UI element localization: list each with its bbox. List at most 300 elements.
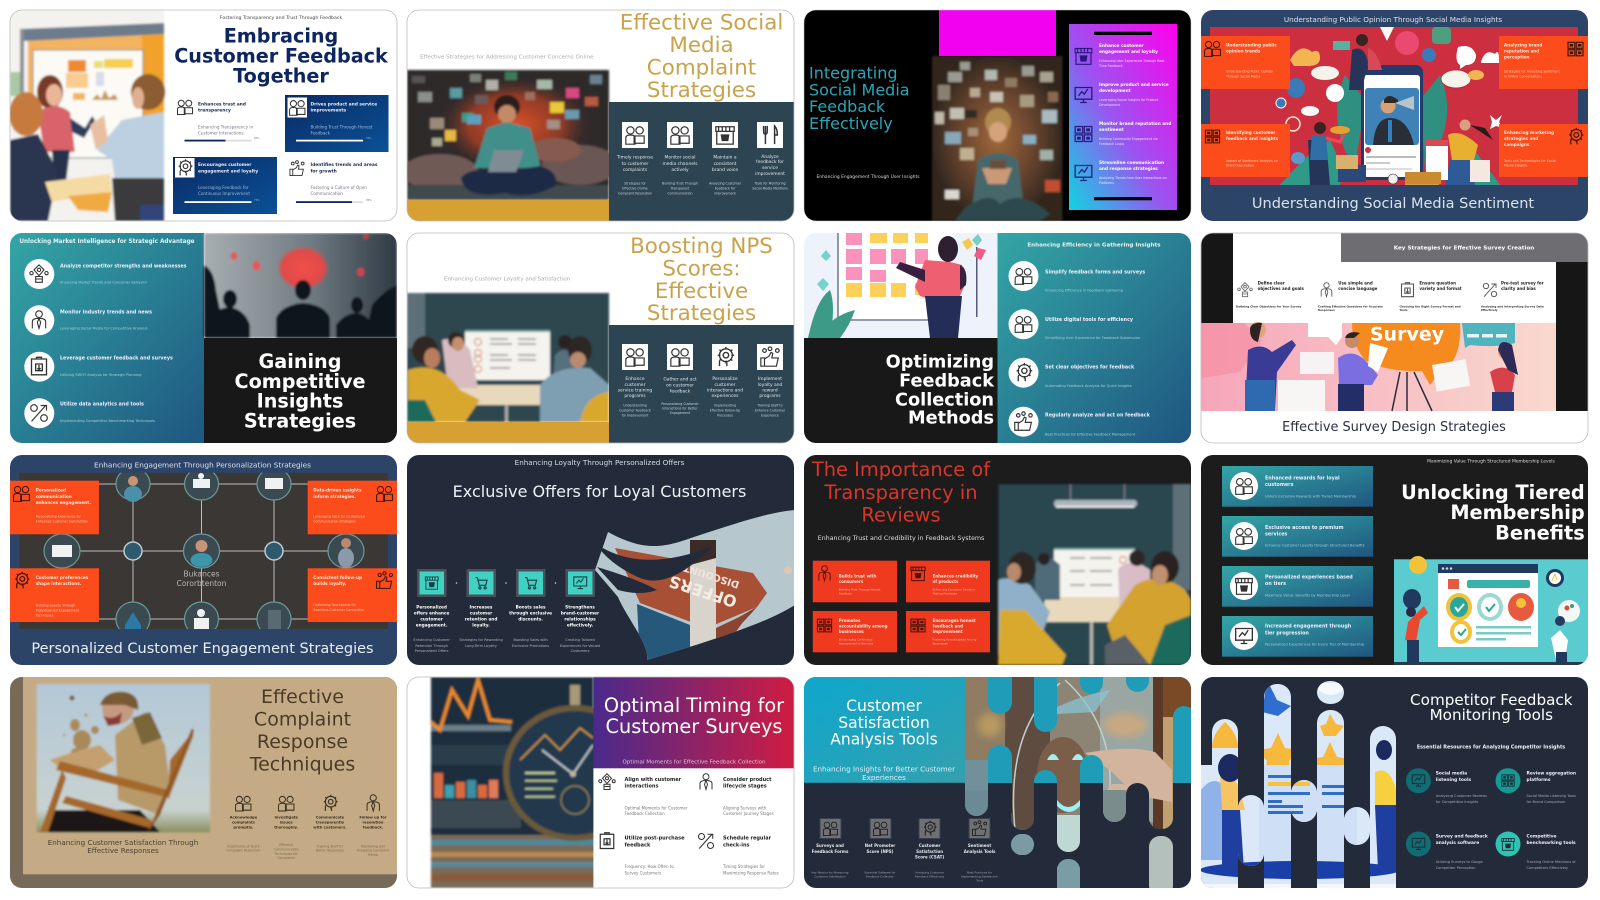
band: gold footer: [407, 200, 609, 221]
box: brand reputation: Analyzing brand: [1504, 42, 1542, 48]
item: training: customer: [625, 382, 646, 388]
item: listening: Analyzing Customer Reviews: [1436, 794, 1487, 798]
item: csat: Score (CSAT): [915, 854, 944, 859]
item: analyze feedback: Social Media Mentions: [752, 186, 788, 190]
item: improve product: development: [1099, 88, 1131, 94]
image: silhouettes facing red sphere: [204, 233, 397, 338]
box: builds trust: Feedback: [839, 591, 852, 595]
item: acknowledge: [226, 796, 260, 853]
item: benchmarking: Tracking Online Mentions of: [1526, 860, 1576, 864]
item: listening: Social media: [1436, 770, 1467, 776]
box: enhances credibility: Enhances credibility: [933, 574, 979, 578]
item: analyze feedback: [752, 122, 788, 190]
box: personalized communication: Enhanced Customer Satisfaction: [36, 520, 88, 524]
item: improve product: Leveraging Social Insights for Product: [1099, 98, 1159, 102]
box: encourages feedback: Fostering Accountability Among: [933, 637, 977, 641]
item: personalized offers: offers enhance: [414, 610, 449, 616]
subtitle: Essential Resources for Analyzing Competitor Insights: [1417, 745, 1565, 751]
card: drives product: Drives product and service: [310, 101, 377, 107]
item: loyalty: reward: [762, 388, 778, 394]
item: loyalty: Implement: [758, 376, 782, 382]
box: customer feedback: feedback and insights: [1226, 136, 1279, 141]
item: consistent voice: Analyzing Customer: [709, 181, 742, 185]
item: monitor brand: Monitor brand reputation and: [1099, 121, 1171, 127]
item: analyze and act: Best Practices for Effective Feedback Management: [1045, 432, 1136, 436]
item: gather: Gather and act: [663, 376, 697, 382]
item: acknowledge: complaints: [232, 821, 256, 825]
item: follow up: Follow up for: [359, 816, 387, 820]
box: promotes accountability: Encouraging Continuous: [839, 637, 873, 641]
item: variety: Tools: [1400, 308, 1408, 312]
box: customer preferences: Techniques: [35, 614, 54, 618]
item: pre-test: clarity and bias: [1501, 286, 1536, 291]
header gradient: Optimal Moments for Effective Feedback Collection: [622, 760, 766, 766]
box: builds trust: Building Trust Through Honest: [839, 587, 881, 591]
title: Satisfaction: [838, 714, 930, 732]
item: check-ins: Timing Strategies for: [722, 864, 765, 869]
item: rewards: Enhanced rewards for loyal: [1265, 475, 1340, 481]
item: streamline communication: [1075, 160, 1167, 185]
item: objectives: Set clear objectives for feedback: [1045, 365, 1135, 371]
item: loyalty: programs: [759, 393, 781, 399]
subtitle: Enhancing Trust and Credibility in Feedback Systems: [818, 535, 984, 542]
item: investigate: [274, 796, 299, 860]
item: data analytics: Implementing Competitive Benchmarking Techniques: [60, 419, 155, 423]
title: Social Media: [809, 80, 910, 100]
box: marketing: strategies and: [1504, 136, 1538, 141]
box: brand reputation: in Online Conversations: [1504, 75, 1542, 79]
item: aggregation: Review aggregation: [1526, 770, 1576, 776]
item: gather: Personalizing Customer: [661, 402, 699, 406]
block: black title background: [204, 338, 397, 443]
item: premium access: Enhance Customer Loyalty through Structured Benefits: [1265, 544, 1365, 548]
panel: Embracing Customer Feedback Together: [9, 10, 397, 221]
box: customer preferences: Individualized Engagement: [36, 609, 80, 613]
panel: dark strategies: [609, 325, 794, 443]
box: enhances credibility: of products: [933, 579, 959, 584]
title: Feedback: [899, 372, 995, 392]
network diagram: Cororbtenton: [177, 579, 227, 588]
item: surveys: [812, 818, 849, 878]
item: retention: customer: [470, 610, 493, 616]
panel: Competitor Feedback Monitoring Tools: [1200, 677, 1588, 888]
image: meeting room: [407, 293, 609, 422]
item: communicate: Better Responses: [316, 849, 344, 853]
title: Effective Survey Design Strategies: [1282, 420, 1506, 435]
network diagram: Bukances: [183, 570, 220, 578]
item: personalize: Processes: [717, 413, 733, 417]
item: objectives: Automating Feedback Analysis for Quick Insights: [1045, 384, 1132, 388]
card: identifies trends: Identifies trends and areas: [310, 162, 378, 168]
card: encourages engagement: Continuous Improvement: [198, 191, 250, 196]
item: nps: Feedback Collection: [866, 874, 894, 878]
box: brand reputation: [1499, 36, 1588, 89]
item: personalized offers: Personalized Offers: [415, 649, 449, 653]
title: Effective Social: [620, 10, 783, 35]
panel: Effective Survey Design Strategies: [1200, 233, 1588, 443]
item: monitor brand: sentiment: [1099, 127, 1124, 133]
item: check-ins: Schedule regular: [723, 836, 772, 842]
item: objectives: [1236, 280, 1305, 308]
card: drives product: [285, 95, 388, 152]
item: lifecycle: Consider product: [723, 777, 772, 783]
item: nps: Score (NPS): [867, 849, 894, 854]
box: customer feedback: Brand Reputation: [1226, 164, 1254, 168]
item: pre-test: Analyzing and Interpreting Survey Data: [1481, 304, 1544, 308]
item: relationships: Customers: [571, 649, 590, 653]
box: public opinion: Understanding Public Opinion: [1226, 70, 1273, 74]
item: language: Responses: [1318, 308, 1335, 312]
item: sales: discounts.: [518, 616, 543, 622]
item: timely response: Timely response: [616, 154, 653, 160]
box: follow-up: builds loyalty.: [313, 581, 347, 586]
item: communicate: Training Staff for: [316, 844, 344, 848]
item: monitor channels: Monitor social: [665, 154, 695, 160]
title: Gaining: [259, 350, 341, 373]
image: discount offer sign in ribbon shape: DISCOUNTS: [675, 559, 741, 590]
item: surveys: Key Metrics for Measuring: [812, 870, 849, 874]
item: variety: variety and format: [1419, 286, 1462, 291]
item: personalize: Implementing: [714, 403, 736, 407]
item: lifecycle: Aligning Surveys with: [723, 805, 767, 810]
item: retention: loyalty.: [472, 622, 490, 628]
box: data-driven: Data-driven insights: [313, 488, 362, 492]
item: relationships: effectively.: [567, 622, 594, 628]
item: follow up: feedback.: [363, 826, 384, 830]
item: lifecycle: Customer Journey Stages: [723, 811, 774, 816]
item: nps: [864, 818, 896, 878]
item: training: Understanding: [623, 403, 647, 407]
box: customer preferences: Customer preferences: [36, 575, 89, 580]
item: survey software: Utilizing Surveys to Gauge: [1436, 860, 1483, 864]
item: acknowledge: Acknowledge: [230, 816, 258, 820]
box: data-driven: [308, 481, 397, 534]
item: tier progression: [1222, 616, 1373, 657]
title: Insights: [257, 390, 343, 413]
item: retention: retention and: [465, 616, 497, 622]
item: training: service training: [618, 388, 652, 394]
item: check-ins: check-ins: [723, 842, 750, 848]
item: rewards: [1222, 466, 1373, 507]
item: objectives: objectives and goals: [1258, 286, 1305, 291]
card: identifies trends: for growth: [310, 168, 337, 174]
item: aggregation: Social Media Listening Tools: [1526, 794, 1576, 798]
item: investigate: thoroughly.: [274, 826, 299, 830]
item: csat: Satisfaction: [916, 849, 943, 854]
item: streamline communication: Analyzing Trends from User Interactions on: [1099, 176, 1167, 180]
overlay: rounded teal and dark pills: [988, 660, 1195, 813]
item: align interactions: Align with customer: [624, 777, 682, 783]
illustration: people around survey sign: [1200, 322, 1556, 411]
image: angry man on chair: [37, 684, 210, 832]
box: promotes accountability: businesses: [839, 629, 864, 634]
card: drives product: improvements: [310, 108, 347, 114]
title: Exclusive Offers for Loyal Customers: [453, 482, 746, 501]
item: monitor channels: Communication: [667, 191, 693, 195]
box: data-driven: Communication Strategies: [313, 520, 356, 524]
title: Complaint: [254, 708, 351, 730]
item: personalized experiences: on tiers: [1265, 581, 1286, 587]
image: team at whiteboard watercolor: [9, 10, 165, 221]
item: personalized offers: Retention Through: [415, 644, 448, 648]
box: marketing: campaigns: [1504, 142, 1530, 147]
title: Monitoring Tools: [1430, 706, 1553, 724]
item: follow up: resolution: [362, 821, 384, 825]
item: loyalty: Training Staff to: [756, 403, 783, 407]
item: investigate: Communication: [274, 847, 299, 851]
item: personalize: Effective Follow-Up: [710, 408, 740, 412]
item: aggregation: platforms: [1526, 777, 1551, 783]
item: timely response: to customer: [622, 161, 649, 167]
item: variety: Ensure question: [1419, 280, 1456, 286]
box: personalized communication: Personalizing Experience for: [36, 515, 82, 519]
item: benchmarking: Competitive: [1526, 834, 1557, 840]
card: drives product: 70%: [366, 136, 372, 140]
box: data-driven: Leveraging Data for Customized: [313, 515, 365, 519]
item: relationships: Strengthens: [565, 604, 595, 610]
item: surveys: Surveys and: [816, 843, 844, 848]
item: personalized offers: [413, 569, 450, 653]
item: sentiment: [961, 818, 998, 882]
box: promotes accountability: [813, 611, 897, 652]
item: data analytics: Utilize data analytics and tools: [60, 401, 144, 407]
item: post-purchase: Frequency: How Often to: [624, 864, 674, 869]
item: premium access: Exclusive access to premium: [1265, 525, 1344, 531]
box: marketing: Tools and Technologies for Social: [1503, 159, 1556, 163]
item: csat: Customer: [919, 843, 940, 848]
item: monitor trends: Monitor industry trends and news: [60, 309, 152, 315]
subtitle: Enhancing Customer Loyalty and Satisfaction: [444, 277, 571, 283]
item: investigate: Techniques for: [274, 852, 298, 856]
title: Integrating: [809, 64, 898, 82]
item: timely response: complaints: [623, 167, 648, 173]
card: enhances trust: transparency: [198, 108, 231, 114]
box: enhances credibility: Making Processes: [933, 591, 958, 595]
item: sales: Boosting Sales with: [513, 638, 548, 642]
box: encourages feedback: improvement: [933, 629, 963, 634]
box: encourages feedback: Encourages honest: [933, 618, 976, 623]
panel: Optimizing Feedback Collection Methods: [804, 233, 1191, 443]
item: monitor brand: [1075, 121, 1171, 146]
item: personalized offers: customer: [420, 616, 444, 622]
item: streamline communication: Streamline communication: [1099, 160, 1164, 166]
box: follow-up: [308, 568, 397, 622]
band: gold footer: [407, 422, 609, 443]
box: public opinion: Understanding public: [1226, 42, 1277, 48]
item: sales: through exclusive: [509, 610, 552, 616]
card: identifies trends: 85%: [366, 198, 372, 202]
item: csat: Feedback Effectively: [915, 874, 945, 878]
item: language: concise language: [1338, 286, 1378, 291]
panel: Optimal Timing for Customer Surveys: [407, 677, 794, 889]
item: follow up: Monitoring and: [361, 844, 385, 848]
caption: Enhancing Customer Satisfaction Through: [48, 838, 198, 847]
item: follow up: Analyzing Complaint: [357, 849, 390, 853]
title: Scores:: [662, 256, 741, 282]
item: post-purchase: [600, 833, 685, 875]
item: communicate: [313, 795, 347, 853]
item: align interactions: Feedback Collection: [624, 811, 665, 816]
people figures: [1308, 34, 1493, 185]
item: improve product: Development: [1099, 103, 1121, 107]
box: marketing: [1499, 124, 1588, 177]
card: enhances trust: [177, 100, 260, 142]
box: customer feedback: Impact of Sentiment Analysis on: [1226, 159, 1278, 163]
item: enhance engagement: Time Feedback: [1098, 64, 1123, 68]
subtitle: Enhancing Loyalty Through Personalized Offers: [515, 458, 685, 467]
item: gather: Interactions for Better: [662, 406, 698, 410]
item: surveys: Customer Satisfaction: [814, 874, 846, 878]
item: sales: Exclusive Promotions: [512, 644, 549, 648]
card: enhances trust: 60%: [254, 136, 260, 140]
box: follow-up: Consistent follow-up: [313, 575, 362, 580]
item: training: Enhance: [625, 376, 645, 382]
item: enhance engagement: Enhancing User Experience Through Real-: [1099, 59, 1165, 63]
card: encourages engagement: Leveraging Feedback for: [198, 185, 249, 190]
item: loyalty: loyalty and: [758, 382, 783, 388]
title: Media: [669, 33, 734, 58]
title: Strategies: [647, 301, 756, 326]
item: post-purchase: Survey Customers: [624, 870, 661, 875]
item: communicate: transparently: [316, 821, 345, 825]
box: marketing: Enhancing marketing: [1504, 130, 1554, 135]
panel: The Importance of Transparency in Reviews: [804, 455, 1191, 665]
panel: Boosting NPS Scores: [407, 233, 794, 443]
header gradient: [593, 677, 794, 768]
item: analyze feedback: improvement: [755, 171, 785, 177]
block: magenta header: [939, 10, 1056, 56]
card: enhances trust: Enhancing Transparency in: [198, 124, 254, 129]
title: Customer Feedback: [174, 44, 389, 68]
item: training: Customer Feedback: [619, 408, 651, 412]
item: investigate: Effective: [279, 843, 293, 847]
item: personalized experiences: Maximize Value: Benefits by Membership Level: [1265, 593, 1350, 597]
header gradient: Customer Surveys: [606, 715, 782, 738]
item: training: for Improvement: [622, 413, 649, 417]
title: Boosting NPS: [630, 234, 773, 259]
box: customer preferences: shape interactions.: [36, 581, 82, 586]
item: leverage feedback: Leverage customer feedback and surveys: [60, 355, 173, 361]
box: encourages feedback: [906, 611, 990, 652]
item: follow up: [357, 795, 390, 857]
item: monitor channels: [662, 122, 698, 195]
panel: Customer Satisfaction Analysis Tools: [804, 660, 1195, 896]
item: communicate: with customers.: [313, 826, 347, 830]
subtitle: Enhancing Engagement Through User Insights: [816, 174, 920, 180]
header gradient: Optimal Timing for: [604, 694, 784, 717]
item: personalize: Personalize: [712, 376, 738, 382]
item: relationships: relationships: [564, 616, 596, 622]
item: personalize: [707, 344, 743, 417]
card: drives product: Feedback: [310, 130, 331, 135]
image: discount offer sign in ribbon shape: [590, 505, 796, 665]
item: variety: [1400, 280, 1462, 312]
box: customer feedback: Identifying customer: [1226, 130, 1276, 135]
item: surveys: Feedback Forms: [812, 849, 849, 854]
item: enhance engagement: engagement and loyalty: [1099, 49, 1158, 55]
subtitle: Effective Strategies for Addressing Customer Concerns Online: [420, 54, 594, 60]
illustration: reviewers with stars in strips: [1200, 677, 1400, 888]
box: brand reputation: perception: [1504, 54, 1530, 60]
item: lifecycle: [700, 774, 774, 816]
item: training: programs: [624, 393, 646, 399]
subtitle: Enhancing Engagement Through Personalization Strategies: [94, 460, 311, 469]
box: enhances credibility: Enhancing Consumer Decision-: [933, 587, 975, 591]
item: analyze feedback: service: [762, 165, 778, 171]
item: consistent voice: [709, 122, 742, 195]
item: simplify: Enhancing Efficiency in Feedback Gathering: [1045, 288, 1123, 292]
title: Strategies: [647, 78, 756, 103]
item: listening: [1406, 768, 1487, 804]
item: survey software: [1406, 832, 1488, 870]
item: relationships: Creating Tailored: [565, 638, 595, 642]
illustration: social media phone collage: [1210, 27, 1578, 185]
box: public opinion: opinion trends: [1226, 48, 1261, 54]
box: brand reputation: Strategies for Analyzing Sentiment: [1504, 70, 1560, 74]
item: align interactions: Optimal Moments for Customer: [624, 805, 688, 810]
item: sentiment: Analysis Tools: [964, 849, 996, 854]
box: builds trust: Builds trust with: [839, 574, 876, 578]
title: Together: [233, 64, 329, 88]
block: black title background: [804, 338, 998, 443]
item: tier progression: tier progression: [1265, 630, 1309, 636]
item: retention: [459, 569, 503, 648]
item: timely response: [616, 122, 653, 195]
box: promotes accountability: Promotes: [839, 618, 861, 623]
item: aggregation: [1496, 768, 1576, 804]
title: Transparency in: [823, 481, 978, 504]
item: nps: Net Promoter: [865, 843, 895, 848]
item: sales: Boosts sales: [516, 604, 546, 610]
item: data analytics: [24, 398, 155, 428]
item: acknowledge: promptly.: [233, 826, 254, 830]
item: streamline communication: and response strategies: [1099, 166, 1158, 172]
item: simplify: Simplify feedback forms and surveys: [1045, 269, 1145, 275]
item: analyze and act: Regularly analyze and act on feedback: [1045, 413, 1151, 419]
item: monitor channels: Transparent: [670, 186, 690, 190]
panel: Unlocking Tiered Membership Benefits: [1201, 455, 1588, 665]
box: follow-up: Seamless Customer Connection: [313, 608, 364, 612]
panel: Effective Social Media Complaint Strategies: [402, 10, 794, 221]
title: Competitor Feedback: [1410, 691, 1573, 709]
item: objectives: Define clear: [1258, 280, 1285, 286]
title: Benefits: [1495, 521, 1585, 544]
item: consistent voice: Maintain a: [713, 154, 737, 160]
title: Reviews: [861, 504, 941, 526]
title: Effectively: [809, 114, 893, 133]
title: Feedback: [809, 97, 886, 116]
illustration: membership checklist: [1394, 556, 1588, 665]
item: analyze feedback: Analyze: [761, 154, 779, 160]
item: language: Use simple and: [1338, 280, 1373, 286]
card: identifies trends: [289, 160, 378, 203]
card: enhances trust: Enhances trust and: [198, 101, 246, 107]
item: premium access: services: [1265, 532, 1288, 538]
item: monitor channels: actively: [671, 167, 689, 173]
title: Complaint: [647, 56, 756, 80]
item: loyalty: Experience: [761, 413, 779, 417]
panel: Gaining Competitive Insights Strategies: [10, 233, 397, 443]
title: Customer: [846, 697, 922, 715]
item: analyze competitor: Analyzing Market Trends and Consumer Behavior: [60, 280, 148, 284]
item: personalized experiences: Personalized experiences based: [1265, 574, 1353, 580]
item: analyze and act: [1008, 407, 1151, 437]
panel: gradient list: [1069, 24, 1177, 210]
icons scattered: [1276, 27, 1503, 164]
panel: Personalized Customer Engagement Strategies: [10, 455, 397, 665]
subtitle: Understanding Public Opinion Through Social Media Insights: [1284, 15, 1502, 24]
item: csat: Analyzing Customer: [915, 870, 945, 874]
